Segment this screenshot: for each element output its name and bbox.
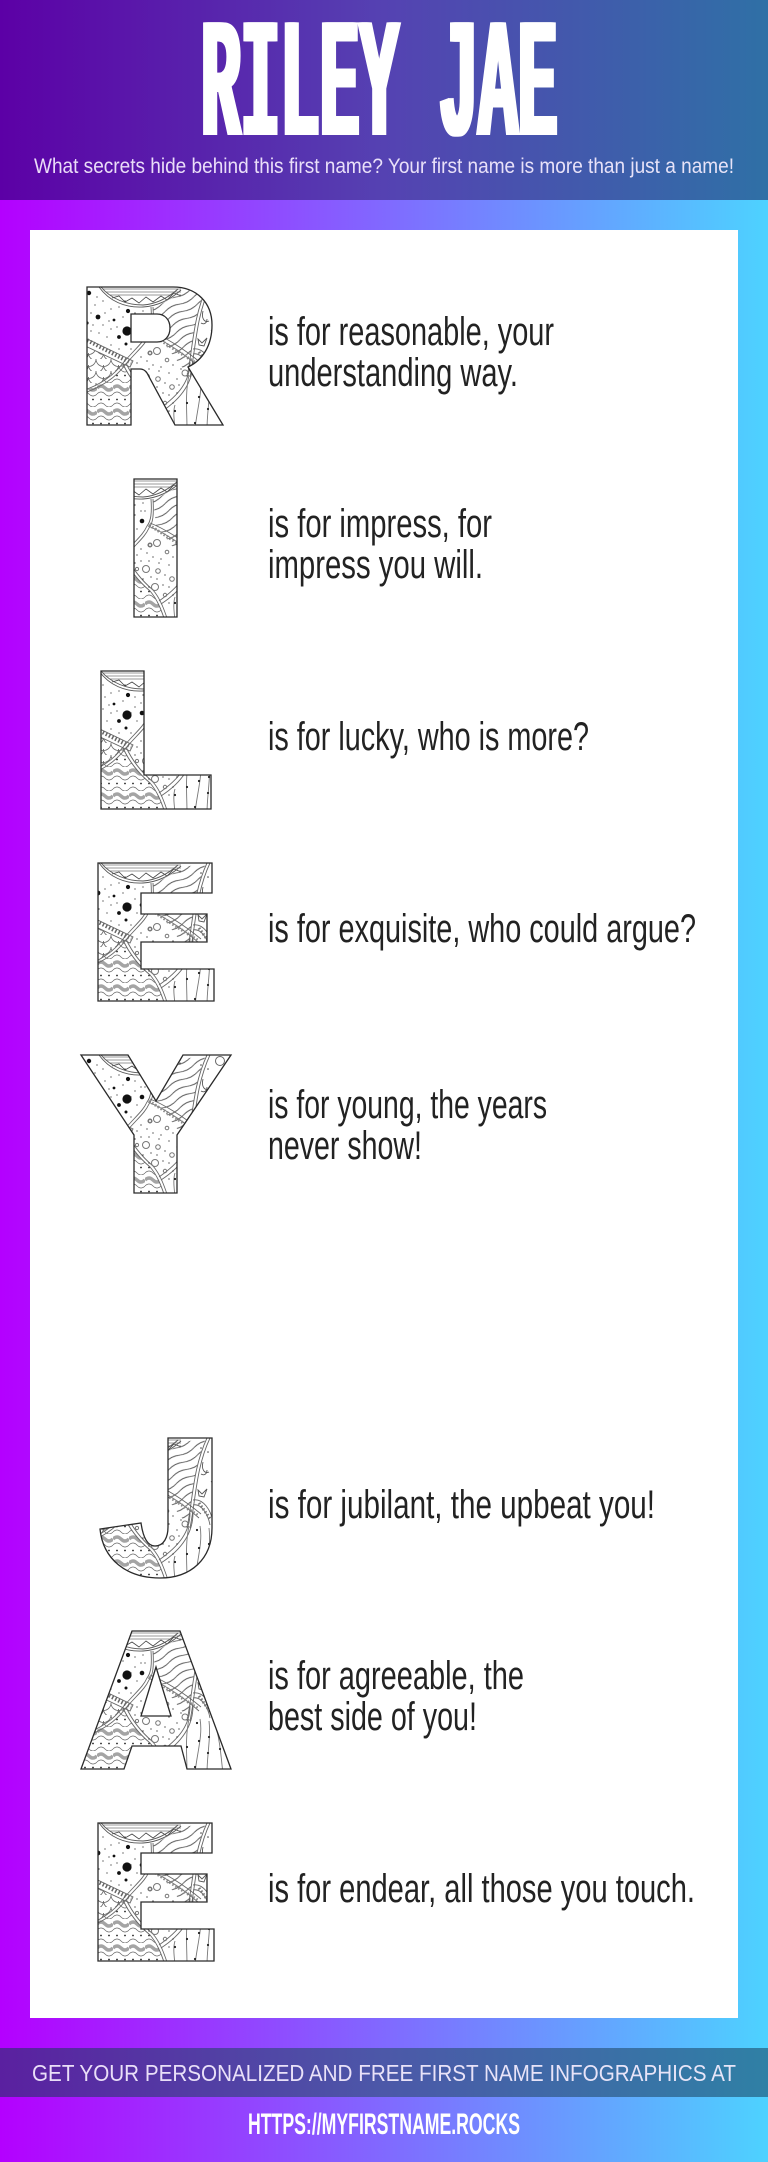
footer band — [0, 2048, 768, 2097]
header band — [0, 0, 768, 200]
icon: zentangle letter I — [134, 479, 177, 617]
icon: zentangle letter R — [87, 287, 223, 425]
footer URL: HTTPS://MYFIRSTNAME.ROCKS — [248, 2108, 520, 2141]
icon: zentangle letter J — [100, 1438, 212, 1578]
row: I — [134, 479, 492, 617]
text: R line: is for reasonable, your — [268, 310, 554, 354]
icon: zentangle letter E — [98, 863, 214, 1001]
text: R line: understanding way. — [268, 351, 518, 395]
row: E second — [98, 1823, 695, 1961]
row: Y — [81, 1055, 547, 1193]
text: Y line: is for young, the years — [268, 1083, 547, 1127]
row: R — [87, 287, 554, 425]
text: A line: best side of you! — [268, 1695, 477, 1739]
icon: zentangle letter A — [81, 1631, 231, 1769]
icon: zentangle letter E — [98, 1823, 214, 1961]
text: I line: impress you will. — [268, 543, 483, 587]
white content panel — [30, 230, 738, 2018]
text: L line: is for lucky, who is more? — [268, 715, 589, 759]
row: J — [100, 1438, 655, 1578]
row: A — [81, 1631, 524, 1769]
text: A line: is for agreeable, the — [268, 1654, 524, 1698]
icon: zentangle letter L — [101, 671, 211, 809]
text: Y line: never show! — [268, 1124, 422, 1168]
row: L — [101, 671, 589, 809]
icon: zentangle letter Y — [81, 1055, 231, 1193]
text: I line: is for impress, for — [268, 502, 492, 546]
row: E — [98, 863, 696, 1001]
